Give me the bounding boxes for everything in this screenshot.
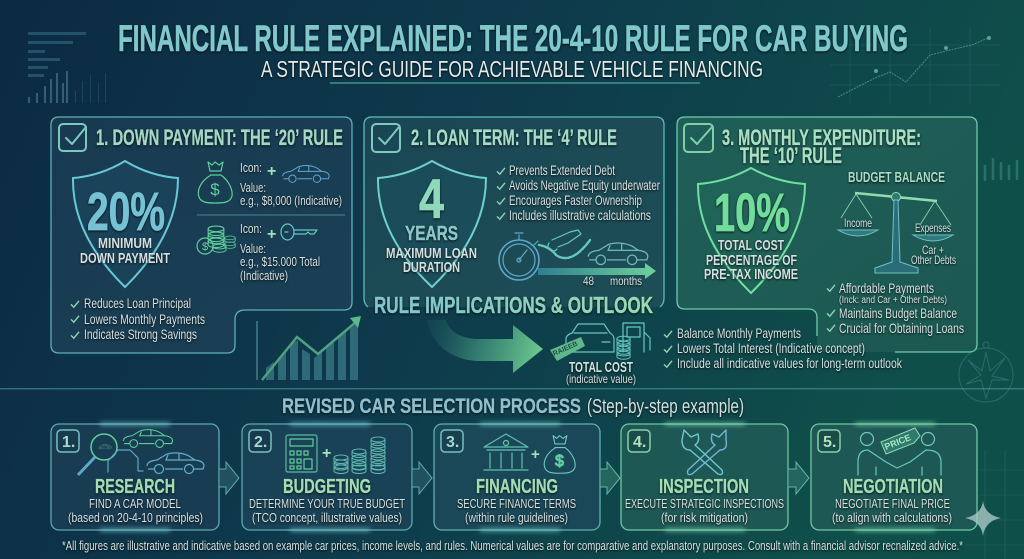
number badge: 3. <box>446 434 459 451</box>
description: (within rule guidelines) <box>465 510 568 525</box>
icon: money bag <box>198 162 232 203</box>
decorative chart: top left <box>28 32 106 103</box>
description <box>249 496 405 525</box>
icon: key and chain <box>539 230 590 258</box>
panel: monthly expenditure <box>677 117 977 352</box>
description: EXECUTE STRATEGIC INSPECTIONS <box>625 496 784 511</box>
description: SECURE FINANCE TERMS <box>457 496 576 511</box>
benefits list: (Inck: and Car + Other Debts) <box>839 295 947 306</box>
panel: down payment <box>51 117 352 353</box>
decorative grid: bottom right <box>960 450 1024 559</box>
description <box>68 496 203 525</box>
benefits list: Includes illustrative calculations <box>509 207 651 223</box>
icon: car front <box>566 324 614 352</box>
benefits list: Prevents Extended Debt <box>509 162 615 178</box>
step 5: negotiation <box>811 424 977 530</box>
budget balance label: BUDGET BALANCE <box>848 169 945 186</box>
icon: coins: $ <box>202 241 208 253</box>
description <box>457 496 576 525</box>
number badge: 5. <box>823 434 836 451</box>
description: (TCO concept, illustrative values) <box>252 510 402 525</box>
step 2: budgeting <box>242 424 412 530</box>
decorative candles: right <box>985 158 1017 181</box>
timeline arrow 48 months: months <box>610 274 642 288</box>
value row 1 <box>240 161 342 208</box>
shield with 20%: 20% <box>87 182 165 242</box>
number badge <box>249 430 271 452</box>
description: (based on 20-4-10 principles) <box>68 510 203 525</box>
icon: handshake and price tag <box>858 428 941 475</box>
description: DETERMINE YOUR TRUE BUDGET <box>249 496 405 511</box>
timeline arrow 48 months: 48 <box>583 274 594 288</box>
icon: coins <box>197 226 235 254</box>
shield with 4 years: DURATION <box>403 259 460 276</box>
icon: stopwatch <box>499 233 539 280</box>
section heading: REVISED CAR SELECTION PROCESS <box>282 395 581 418</box>
step 1: research <box>51 424 219 530</box>
value row 2: Value: <box>240 242 266 256</box>
description: (to align with calculations) <box>832 510 952 525</box>
benefits list <box>71 295 205 342</box>
implications list <box>664 325 903 371</box>
label: indicative value: (indicative value) <box>566 372 636 386</box>
number badge: 4. <box>633 434 646 451</box>
benefits list: Crucial for Obtaining Loans <box>839 320 964 336</box>
value row 1: + <box>267 163 276 180</box>
step 4: inspection <box>621 424 788 530</box>
benefits list <box>827 280 964 336</box>
checkbox icon <box>59 124 86 151</box>
icon: balance scale: Income <box>844 216 872 230</box>
panel: loan term <box>364 117 664 307</box>
icon: calculator and coins <box>286 435 385 474</box>
heading: THE ‘10’ RULE <box>740 143 842 168</box>
value row 1: Icon: <box>240 161 262 175</box>
implications list: Balance Monthly Payments <box>677 325 801 341</box>
shield with 20%: MINIMUM <box>98 235 152 252</box>
benefits list: Indicates Strong Savings <box>84 326 197 342</box>
icon: balance scale: Expenses <box>915 221 951 235</box>
benefits list <box>497 162 660 223</box>
subtitle underline <box>330 82 700 84</box>
description <box>625 496 784 525</box>
benefits list: Maintains Budget Balance <box>839 305 957 321</box>
shield with 20%: DOWN PAYMENT <box>80 250 170 267</box>
number badge <box>818 430 840 452</box>
number badge <box>57 430 79 452</box>
shield with 20% <box>73 161 178 287</box>
benefits list: Reduces Loan Principal <box>84 295 191 311</box>
shield with 10% <box>698 168 805 293</box>
value row 1: Value: <box>240 181 266 195</box>
value row 2: (Indicative) <box>240 269 288 283</box>
value row 2: Icon: <box>240 222 262 236</box>
total cost illustration <box>550 323 650 386</box>
benefits list: Affordable Payments <box>839 280 934 296</box>
heading: 3. MONTHLY EXPENDITURE: <box>722 125 921 150</box>
description: (for risk mitigation) <box>661 510 748 525</box>
benefits list: Encourages Faster Ownership <box>509 192 642 208</box>
label: FINANCING <box>476 476 558 498</box>
heading <box>722 125 921 168</box>
checkbox icon <box>372 124 400 152</box>
value row 2: + <box>267 226 276 243</box>
icon: bank and bag: + <box>531 446 540 463</box>
arrow: step 1 to 2 <box>219 462 239 494</box>
number badge: 2. <box>254 434 267 451</box>
icon: bank and bag <box>484 434 575 473</box>
label: INSPECTION <box>659 476 749 498</box>
shield with 4 years: YEARS <box>405 223 458 245</box>
icon: price tag: RAIEEB <box>552 341 579 358</box>
icon: crossed wrenches <box>682 430 726 474</box>
decorative chart: top right <box>830 28 1000 105</box>
value row 1: e.g., $8,000 (Indicative) <box>240 194 342 208</box>
value row 2: e.g., $15.000 Total <box>240 255 320 269</box>
shield with 10%: PRE-TAX INCOME <box>704 266 798 283</box>
label: NEGOTIATION <box>843 476 943 498</box>
subtitle: A STRATEGIC GUIDE FOR ACHIEVABLE VEHICLE FINANCING <box>261 56 763 82</box>
step 3: financing <box>434 424 600 530</box>
heading: 1. DOWN PAYMENT: THE ‘20’ RULE <box>96 125 343 150</box>
number badge <box>628 430 650 452</box>
shield with 10%: 10% <box>714 183 790 243</box>
shield with 4 years: MAXIMUM LOAN <box>386 245 477 262</box>
arrow: implications to total cost <box>427 320 543 373</box>
benefits list: Lowers Monthly Payments <box>84 311 205 327</box>
icon: calculator and coins: + <box>322 445 331 462</box>
arrow: step 3 to 4 <box>600 462 620 494</box>
number badge: 1. <box>62 434 75 451</box>
section heading: (Step-by-step example) <box>587 396 744 418</box>
heading: 2. LOAN TERM: THE ‘4’ RULE <box>411 125 617 150</box>
implications list: Include all indicative values for long-term outlook <box>677 355 903 371</box>
label: RESEARCH <box>95 476 175 498</box>
label: BUDGETING <box>283 476 371 498</box>
growth chart <box>257 316 361 380</box>
icon: balance scale: Other Debts <box>911 253 956 267</box>
description: FIND A CAR MODEL <box>89 496 181 511</box>
description <box>832 496 952 525</box>
label: total cost: TOTAL COST <box>569 359 633 376</box>
heading: rule implications: RULE IMPLICATIONS & OUTLOOK <box>374 292 653 318</box>
section divider <box>0 388 1024 389</box>
shield with 4 years: 4 <box>419 167 444 230</box>
benefits list: Avoids Negative Equity underwater <box>509 177 660 193</box>
shield with 10%: PERCENTAGE OF <box>706 252 797 269</box>
checkbox icon <box>684 124 713 152</box>
shield with 4 years <box>378 161 486 287</box>
icon: balance scale <box>838 192 956 273</box>
icon: car <box>588 243 648 265</box>
icon: balance scale: Car + <box>922 243 944 257</box>
description: NEGOTIATE FINAL PRICE <box>835 496 950 511</box>
implications list: Lowers Total Interest (Indicative concept) <box>677 340 865 356</box>
shield with 10%: TOTAL COST <box>718 237 784 254</box>
arrow: step 2 to 3 <box>412 462 432 494</box>
icon: fuel pump and coins <box>617 323 650 359</box>
number badge <box>441 430 463 452</box>
icon: sparkle <box>965 501 1001 536</box>
value row 2 <box>240 222 320 283</box>
icon: magnifier and cars <box>78 430 204 475</box>
icon: handshake and price tag: PRICE <box>883 432 912 452</box>
timeline arrow 48 months <box>538 263 656 288</box>
icon: compass <box>959 342 1013 402</box>
arrow: step 4 to 5 <box>788 462 809 494</box>
